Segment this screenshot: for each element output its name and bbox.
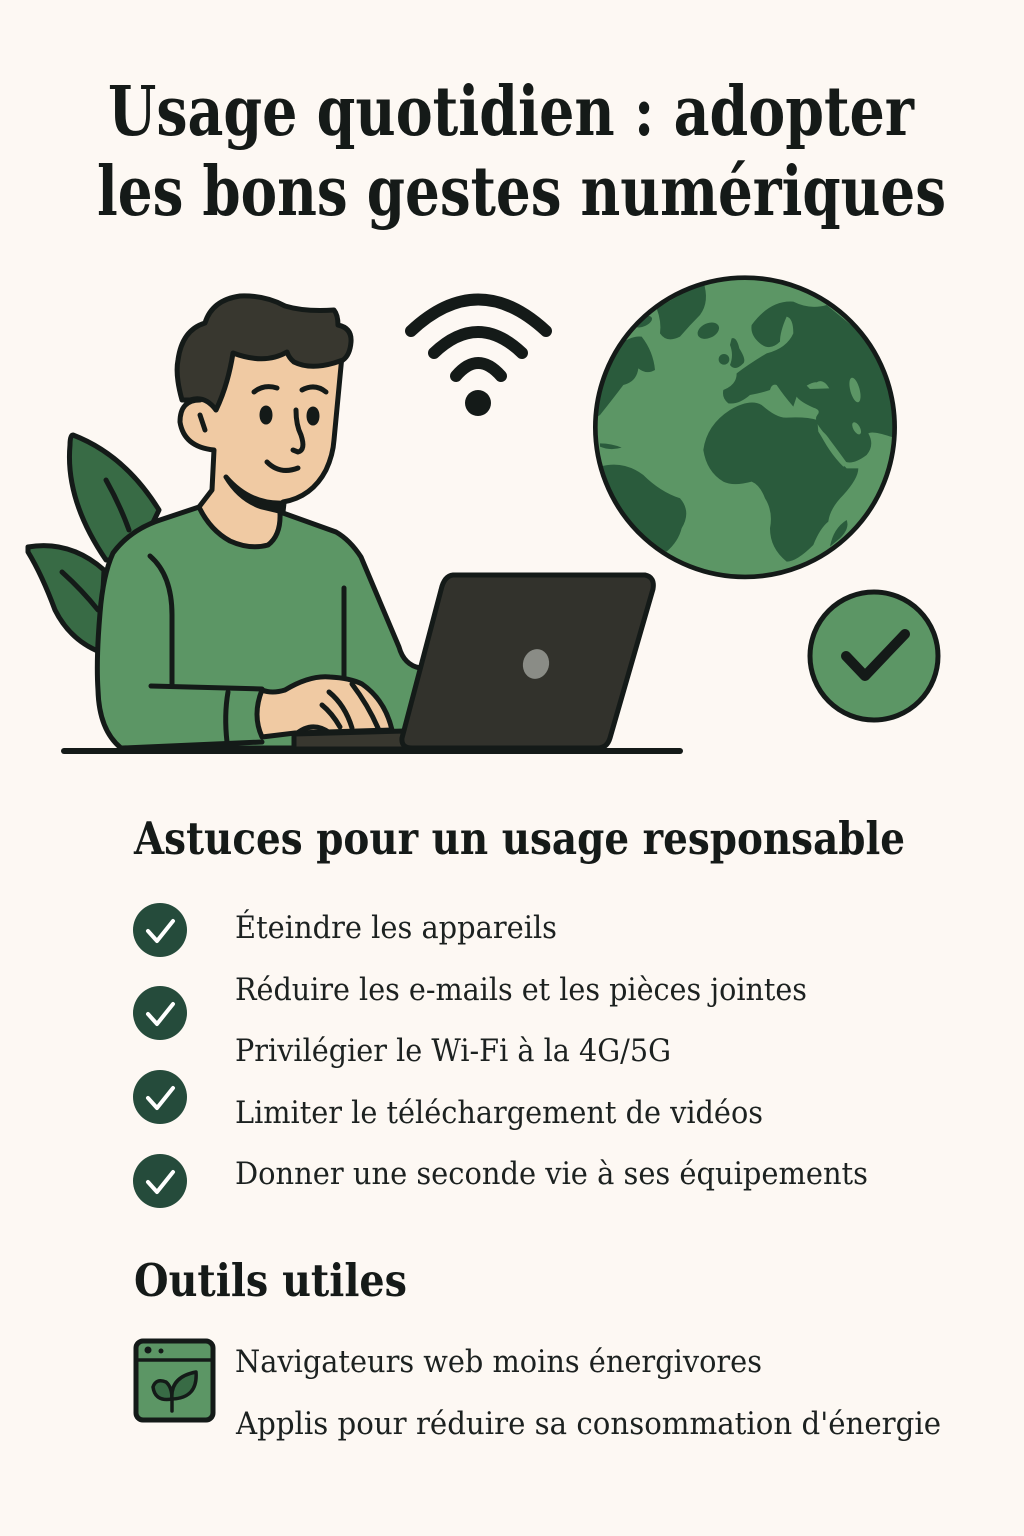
laptop base: [294, 731, 405, 749]
icon: check 3: [133, 1070, 187, 1124]
tools list: Navigateurs web moins énergivores: [235, 1344, 762, 1380]
icon: check 1: [133, 903, 187, 957]
tips list: [235, 908, 868, 1192]
icon: browser with leaf: [136, 1341, 213, 1420]
icon: check badge: [810, 592, 938, 720]
head and neck: [180, 345, 343, 547]
heading: tools: Outils utiles: [134, 1254, 407, 1307]
illustration: person at laptop: [28, 296, 680, 751]
sweater: [97, 507, 420, 748]
tips list: Réduire les e-mails et les pièces jointes: [235, 972, 807, 1008]
icon: small leaf: [28, 546, 104, 652]
tools list: Applis pour réduire sa consommation d'énergie: [235, 1406, 941, 1442]
laptop: [402, 575, 653, 748]
laptop logo: [520, 646, 552, 682]
icon: globe: [590, 278, 900, 577]
hair: [177, 296, 351, 410]
tips list: Privilégier le Wi-Fi à la 4G/5G: [235, 1033, 671, 1069]
tools list: [235, 1344, 941, 1442]
hand: [257, 677, 392, 737]
tips list: Donner une seconde vie à ses équipements: [235, 1156, 868, 1192]
title: [97, 72, 946, 232]
tips list: Limiter le téléchargement de vidéos: [235, 1095, 763, 1131]
heading: tips: Astuces pour un usage responsable: [133, 812, 905, 865]
checklist icons: [133, 903, 187, 1208]
icon: large leaf: [69, 435, 159, 560]
icon: check 2: [133, 986, 187, 1040]
desk line: [64, 748, 680, 754]
icon: wifi: [411, 300, 546, 416]
tips list: Éteindre les appareils: [235, 908, 557, 946]
icon: check 4: [133, 1154, 187, 1208]
